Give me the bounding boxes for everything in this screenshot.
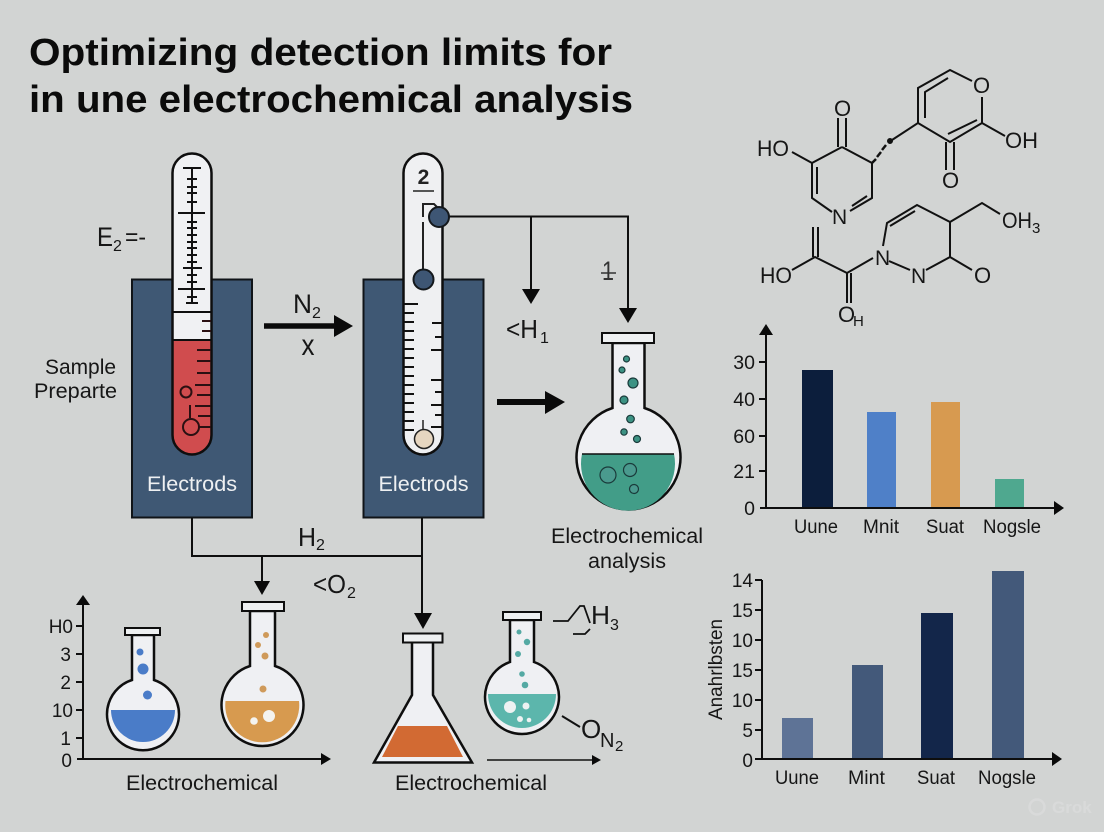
x labels: Mint bbox=[848, 768, 886, 789]
label: ON2 with bond bbox=[562, 714, 623, 755]
y axis title: Anahrlbsten bbox=[706, 619, 727, 720]
x labels: Nogsle bbox=[978, 768, 1036, 789]
x labels: Uune bbox=[775, 768, 819, 789]
chart axes: bottom left flasks bbox=[49, 595, 331, 772]
label: <O2: <O bbox=[313, 569, 346, 599]
label: H3 with bond: H bbox=[591, 600, 610, 630]
bar chart: bottom bbox=[706, 571, 1062, 789]
arrow to flask bbox=[497, 391, 565, 414]
x labels: Mnit bbox=[863, 517, 900, 538]
arrow: N2 bbox=[264, 289, 353, 362]
label: electrochemical left: Electrochemical bbox=[126, 771, 278, 795]
molecule atom labels: N bbox=[911, 265, 926, 288]
label: sample preparation bbox=[34, 356, 117, 403]
x labels bbox=[775, 768, 1036, 789]
label: electrochemical centre: Electrochemical bbox=[395, 771, 547, 795]
molecule atom labels: O bbox=[973, 73, 990, 98]
y labels: 0 bbox=[742, 751, 753, 772]
x labels: Nogsle bbox=[983, 517, 1041, 538]
label: E2: =- bbox=[125, 224, 146, 251]
chart axes: bottom left flasks: 0 bbox=[61, 751, 72, 772]
y labels: 40 bbox=[733, 389, 755, 411]
label: <H1: 1 bbox=[540, 330, 549, 347]
flask: electrochemical analysis bbox=[576, 333, 681, 511]
molecule atom labels: HO bbox=[760, 263, 792, 288]
label: 1: 1 bbox=[602, 256, 614, 286]
label: H2: H bbox=[298, 522, 316, 552]
label: <O2: 2 bbox=[347, 585, 356, 602]
molecule diagram bbox=[757, 70, 1040, 330]
label: E2: E bbox=[97, 222, 113, 252]
arrow: N2: N bbox=[293, 289, 312, 319]
label: H2: 2 bbox=[316, 537, 325, 554]
x labels: Uune bbox=[794, 517, 838, 538]
chart axes: bottom left flasks: 2 bbox=[60, 673, 71, 694]
arrow: bottom centre bbox=[487, 755, 601, 765]
molecule atom labels: O bbox=[942, 168, 959, 193]
label: sample preparation: Preparte bbox=[34, 380, 117, 403]
y labels: 10 bbox=[732, 691, 753, 712]
y labels: 5 bbox=[742, 721, 753, 742]
electrode label: Electrods bbox=[147, 472, 237, 496]
molecule atom labels: OH bbox=[1005, 128, 1038, 153]
tube: 2 bbox=[418, 166, 429, 189]
label: sample preparation: Sample bbox=[45, 356, 116, 379]
title bbox=[29, 32, 633, 121]
molecule atom labels bbox=[757, 73, 1040, 330]
chart axes: bottom left flasks: H0 bbox=[49, 617, 73, 638]
connector lines from node to analysis flask bbox=[429, 207, 637, 323]
label: ON2 with bond: 2 bbox=[615, 738, 623, 755]
watermark bbox=[1030, 798, 1092, 817]
x labels bbox=[794, 517, 1041, 538]
axes bbox=[759, 324, 1064, 515]
electrode label: Electrods bbox=[378, 472, 468, 496]
bar chart: top bbox=[733, 324, 1064, 538]
axes bbox=[755, 580, 1062, 766]
molecule atom labels: O bbox=[974, 263, 991, 288]
molecule atom labels: N bbox=[875, 247, 890, 270]
label: E2 bbox=[97, 222, 146, 255]
x labels: Suat bbox=[917, 768, 956, 789]
panel: left electrode cell bbox=[132, 154, 252, 518]
label: electrochemical analysis bbox=[551, 524, 703, 573]
y labels bbox=[732, 571, 753, 772]
chart axes: bottom left flasks: 10 bbox=[52, 701, 73, 722]
title: in une electrochemical analysis bbox=[29, 79, 633, 121]
y labels: 10 bbox=[732, 631, 753, 652]
label: H3 with bond: 3 bbox=[610, 617, 619, 634]
thermometer tube bbox=[172, 154, 212, 455]
bars bbox=[782, 571, 1024, 759]
molecule atom labels: H bbox=[853, 313, 864, 330]
arrow: N2: 2 bbox=[312, 305, 321, 322]
label: <H1: <H bbox=[506, 314, 538, 344]
panel: right electrode cell bbox=[364, 154, 484, 518]
molecule atom labels: O bbox=[834, 96, 851, 121]
y labels: 21 bbox=[733, 461, 755, 483]
molecule atom labels: O bbox=[838, 302, 855, 327]
label: H2 bbox=[298, 522, 325, 554]
molecule atom labels: HO bbox=[757, 136, 789, 161]
molecule atom labels: N bbox=[832, 206, 847, 229]
label: electrochemical analysis: analysis bbox=[588, 549, 666, 573]
title: Optimizing detection limits for bbox=[29, 32, 612, 74]
y labels: 30 bbox=[733, 352, 755, 374]
watermark: Grok bbox=[1052, 798, 1092, 817]
bars bbox=[802, 370, 1024, 508]
arrow: N2: x bbox=[302, 329, 314, 362]
flask: blue bbox=[107, 628, 179, 750]
y labels: 60 bbox=[733, 426, 755, 448]
flask: conical orange bbox=[374, 634, 472, 762]
molecule atom labels: OH bbox=[1002, 208, 1032, 233]
y labels: 15 bbox=[732, 661, 753, 682]
label: E2: 2 bbox=[113, 238, 122, 255]
y labels: 15 bbox=[732, 601, 753, 622]
process connector lines bbox=[192, 518, 432, 629]
label: electrochemical analysis: Electrochemical bbox=[551, 524, 703, 548]
y labels: 0 bbox=[744, 498, 755, 520]
label: H3 with bond bbox=[553, 600, 619, 634]
label: ON2 with bond: N bbox=[600, 730, 614, 752]
y labels: 14 bbox=[732, 571, 753, 592]
chart axes: bottom left flasks: 1 bbox=[60, 729, 71, 750]
flask: teal bbox=[485, 612, 559, 734]
tube bbox=[404, 154, 442, 455]
x labels: Suat bbox=[926, 517, 965, 538]
label: ON2 with bond: O bbox=[581, 714, 601, 744]
flask: orange bbox=[221, 602, 304, 746]
molecule atom labels: 3 bbox=[1032, 220, 1040, 237]
y labels bbox=[733, 352, 755, 520]
chart axes: bottom left flasks: 3 bbox=[60, 645, 71, 666]
